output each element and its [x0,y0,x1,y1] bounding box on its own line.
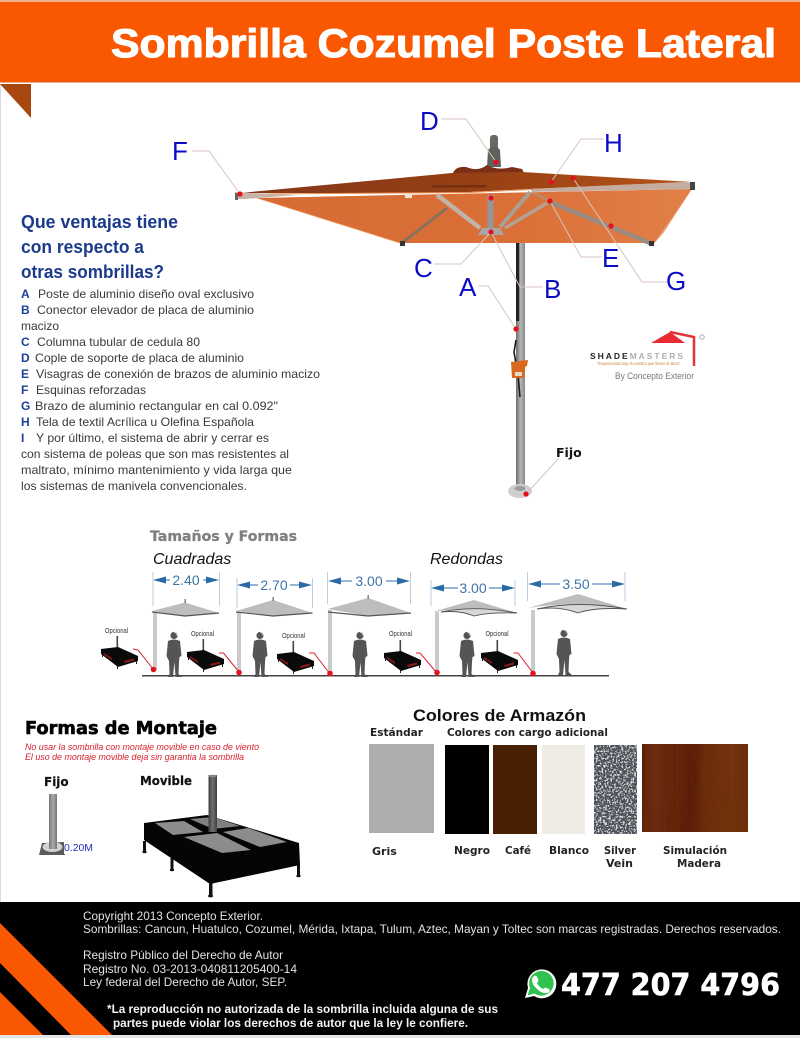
red markers [237,159,614,497]
legal note: partes puede violar los derechos de autor que la ley le confiere. [113,1016,468,1030]
bottom edge [0,1035,800,1038]
square heading: Cuadradas [153,551,231,568]
canopy [235,135,695,246]
title: Sombrilla Cozumel Poste Lateral [111,22,776,66]
part labels: G [666,266,686,296]
part labels: A [459,272,477,302]
advantages heading: con respecto a [21,237,145,257]
shademasters logo: SHADEMASTERS [590,351,683,361]
advantages list: C [21,335,30,349]
movable mount [140,774,301,897]
phone number: 477 207 4796 [561,968,780,1003]
copyright text: Sombrillas: Cancun, Huatulco, Cozumel, Mérida, Ixtapa, Tulum, Aztec, Mayan y Toltec son marcas registradas. Derechos reservados. [83,922,781,936]
fijo label: Fijo [556,445,582,460]
advantages list: Columna tubular de cedula 80 [37,335,200,349]
size: square 3.00 [328,572,411,674]
header banner [0,0,800,83]
advantages heading: Que ventajas tiene [21,212,178,232]
legal note [107,1002,498,1030]
advantages list: B [21,303,30,317]
advantages list: Cople de soporte de placa de aluminio [35,351,244,365]
copyright text [83,909,781,989]
swatch: blanco [542,745,589,857]
size: round 3.50: 3.50 [562,576,590,592]
mounting section [25,718,301,897]
shademasters logo [590,332,704,381]
pole [508,243,532,498]
advantages list: I [21,431,24,445]
size: square 2.70: 2.70 [260,577,288,593]
swatch: wood [642,744,748,870]
copyright text: Ley federal del Derecho de Autor, SEP. [83,975,287,989]
advantages list: Poste de aluminio diseño oval exclusivo [38,287,254,301]
part labels: H [604,128,623,158]
swatch: silver vein: Vein [606,857,633,870]
swatch: negro [445,745,490,857]
legal note: *La reproducción no autorizada de la sombrilla incluida alguna de sus [107,1002,498,1016]
advantages list: Visagras de conexión de brazos de aluminio macizo [36,367,320,381]
advantages list: D [21,351,30,365]
hood [453,165,524,173]
fixed mount: 0.20M [64,842,93,854]
advantages list: Brazo de aluminio rectangular en cal 0.092" [35,399,278,413]
round heading: Redondas [430,551,503,568]
red connectors [133,649,536,676]
underside [257,189,692,245]
extra-charge label: Colores con cargo adicional [447,726,608,739]
advantages list: A [21,287,30,301]
swatch: gris: Gris [372,845,397,858]
part labels: E [602,243,619,273]
optional movable bases: Opcional [191,629,214,638]
ground line [142,675,609,676]
page edge [0,84,1,902]
optional movable bases: Opcional [282,631,305,640]
copyright text: Copyright 2013 Concepto Exterior. [83,909,263,923]
advantages list: H [21,415,30,429]
mounting warning: El uso de montaje movible deja sin garantia la sombrilla [25,752,244,762]
optional movable bases: Opcional [105,626,128,635]
fixed mount [39,775,94,855]
sizes and shapes section [101,529,627,677]
swatch: cafe: Café [505,844,531,857]
advantages list: con sistema de poleas que son mas resistentes al [21,447,289,461]
footer stripes [0,923,112,1035]
advantages list: Conector elevador de placa de aluminio [37,303,254,317]
part labels: B [544,274,561,304]
optional movable bases: Opcional [389,629,412,638]
top fitting [490,135,498,153]
swatch: wood: Madera [677,857,721,870]
mounting heading: Formas de Montaje [25,718,217,739]
swatch: silver vein: Silver [604,844,637,857]
advantages heading: otras sombrillas? [21,262,164,282]
size: square 2.40 [152,572,220,670]
optional movable bases [101,626,518,674]
top face [240,172,692,193]
movable mount: Movible [140,774,192,788]
fixed mount: Fijo [44,775,69,789]
swatch: wood: Simulación [663,844,727,857]
optional movable bases: Opcional [486,629,509,638]
swatch: silver vein [594,745,637,870]
size: square 2.70 [236,577,312,672]
swatch: blanco: Blanco [549,844,589,857]
advantages list: Y por último, el sistema de abrir y cerrar es [36,431,269,445]
advantages list [21,287,320,493]
people silhouettes [166,630,572,677]
shademasters logo: "Experiencias bajo la sombra que llevas al alma" [597,361,680,366]
banner fold [0,84,31,118]
part labels: D [420,106,439,136]
leader lines [192,119,667,494]
copyright text: Registro Público del Derecho de Autor [83,948,283,962]
colours heading: Colores de Armazón [413,706,586,725]
advantages list: Esquinas reforzadas [36,383,146,397]
advantages list: macizo [21,319,59,333]
advantages list: G [21,399,30,413]
advantages list: F [21,383,28,397]
standard label: Estándar [370,726,424,739]
mounting warning: No usar la sombrilla con montaje movible en caso de viento [25,742,259,752]
part labels: F [172,136,188,166]
sizes heading: Tamaños y Formas [150,529,297,545]
frame colours section [369,706,748,870]
icon: whatsapp [525,969,556,998]
size: round 3.00: 3.00 [459,580,487,596]
swatch: negro: Negro [454,844,490,857]
part labels: C [414,253,433,283]
advantages list: Tela de textil Acrílica u Olefina Española [36,415,254,429]
size: square 2.40: 2.40 [172,572,200,588]
mounting warning [25,742,259,762]
shademasters logo: By Concepto Exterior [615,371,694,381]
arms [235,192,297,199]
footer [0,902,800,1035]
advantages heading [21,212,178,282]
copyright text: Registro No. 03-2013-040811205400-14 [83,962,297,976]
size: round 3.00 [431,580,517,673]
advantages list: los sistemas de manivela convencionales. [21,479,247,493]
part labels [172,106,686,304]
advantages list: maltrato, mínimo mantenimiento y vida larga que [21,463,292,477]
size: round 3.50 [528,572,627,673]
advantages list: E [21,367,29,381]
umbrella diagram [172,106,695,498]
advantages text block [21,212,320,493]
swatch: cafe [493,745,537,857]
swatch: gris [369,744,434,858]
size: square 3.00: 3.00 [355,573,383,589]
